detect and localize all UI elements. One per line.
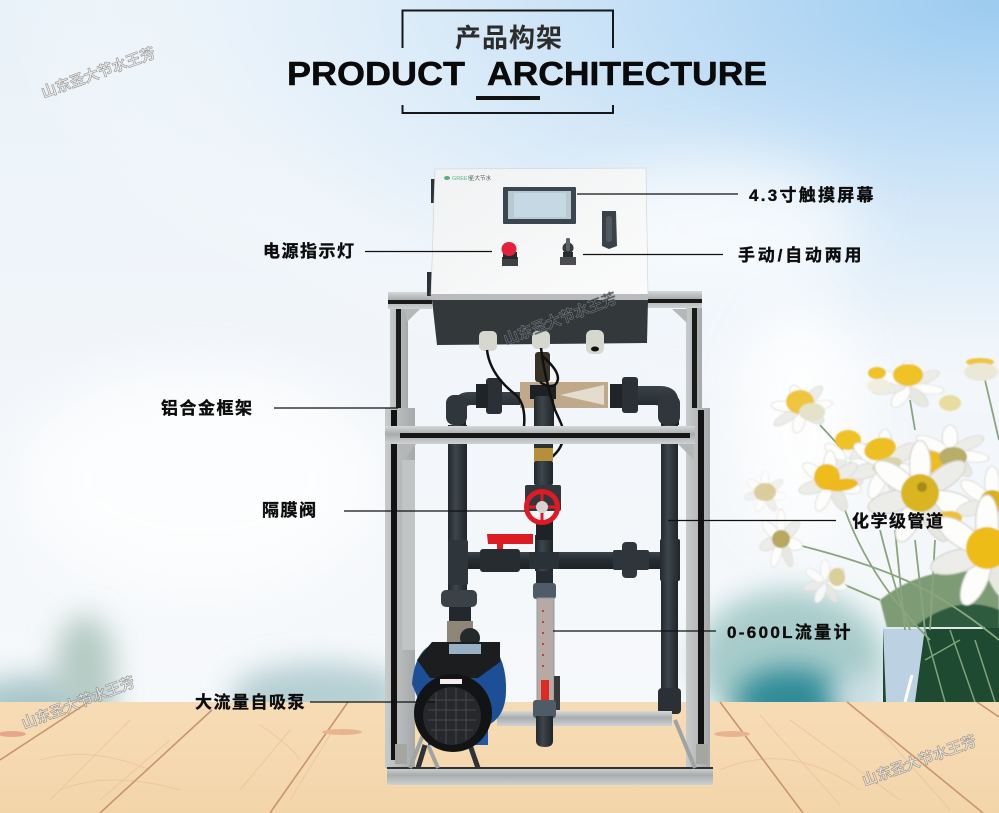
watermark: lower right: 山东圣大节水王芳 bbox=[860, 732, 979, 790]
callout: manual/auto: 手动/自动两用 bbox=[738, 245, 863, 265]
lower frame bbox=[385, 408, 713, 785]
wooden floor bbox=[0, 702, 999, 813]
logo: GREEN bbox=[452, 176, 472, 182]
self-priming pump bbox=[412, 621, 506, 768]
callout: touch screen: 4.3寸触摸屏幕 bbox=[749, 186, 875, 205]
english heading bbox=[287, 55, 767, 92]
watermark: top left: 山东圣大节水王芳 bbox=[39, 44, 158, 102]
title underline bar bbox=[476, 96, 540, 100]
vase bbox=[883, 628, 999, 702]
english heading: ARCHITECTURE bbox=[487, 55, 767, 92]
diaphragm valve bbox=[525, 485, 561, 523]
logo bbox=[444, 174, 492, 182]
chinese heading: 产品构架 bbox=[455, 23, 563, 53]
selector switch bbox=[560, 238, 576, 265]
english heading: PRODUCT bbox=[287, 55, 465, 92]
ball valve handle bbox=[487, 534, 533, 549]
cables bbox=[487, 348, 562, 457]
product: dosing machine bbox=[385, 168, 713, 785]
door handle bbox=[602, 211, 617, 249]
flowers in vase bbox=[743, 358, 999, 702]
cable glands bbox=[479, 330, 604, 354]
callout: diaphragm valve: 隔膜阀 bbox=[262, 501, 318, 520]
watermark: lower left: 山东圣大节水王芳 bbox=[19, 673, 138, 733]
flow meter bbox=[533, 598, 560, 747]
watermark: on control box: 山东圣大节水王芳 bbox=[501, 289, 620, 349]
foliage bbox=[880, 571, 999, 640]
upper frame bbox=[388, 291, 702, 413]
callout: chemical pipe: 化学级管道 bbox=[852, 511, 944, 531]
callout: aluminium frame: 铝合金框架 bbox=[161, 398, 254, 418]
callout: flow meter: 0-600L流量计 bbox=[727, 623, 852, 642]
logo: 圣大节水 bbox=[469, 174, 492, 182]
pipes bbox=[441, 425, 681, 714]
callout: power light: 电源指示灯 bbox=[263, 242, 356, 261]
title block bbox=[287, 10, 767, 113]
title bracket bbox=[402, 10, 613, 113]
daisies bbox=[743, 358, 999, 609]
power indicator bbox=[502, 242, 518, 266]
touch screen bbox=[503, 187, 576, 224]
top pipe and rotameter bbox=[446, 352, 680, 440]
control box bbox=[427, 168, 648, 354]
stems bbox=[790, 380, 999, 640]
callout: pump: 大流量自吸泵 bbox=[195, 692, 306, 712]
